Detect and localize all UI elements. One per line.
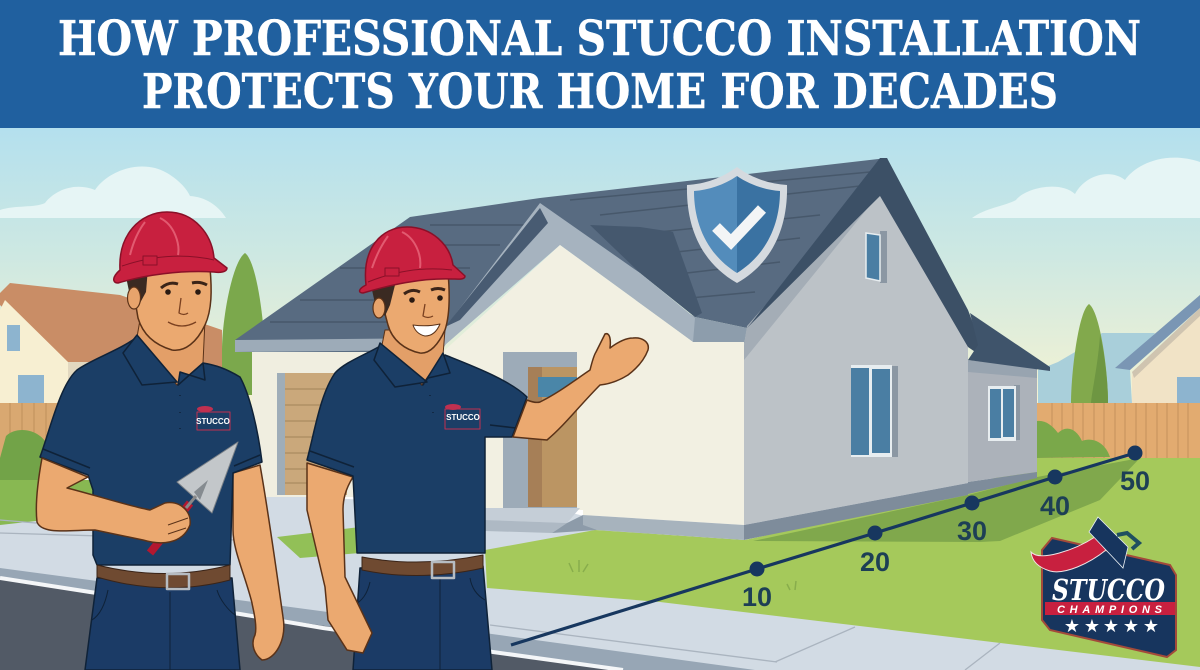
bush right xyxy=(1037,421,1110,458)
face xyxy=(379,272,449,353)
logo trowel xyxy=(1089,517,1139,568)
front wall base xyxy=(583,515,744,540)
grass patch xyxy=(277,527,360,558)
shirt logo xyxy=(445,404,480,429)
shield icon xyxy=(687,167,787,283)
collar xyxy=(374,343,450,387)
polo shirt xyxy=(40,337,262,565)
logo swoosh xyxy=(1031,537,1106,572)
cloud right xyxy=(972,158,1200,218)
timeline labels: 40 xyxy=(1040,491,1070,521)
timeline labels: 20 xyxy=(860,547,890,577)
grey side wall xyxy=(744,183,968,525)
cloud left xyxy=(0,167,226,218)
company logo xyxy=(1031,517,1176,657)
facial features xyxy=(161,282,207,326)
worker right xyxy=(307,227,648,670)
background hill right xyxy=(1038,333,1155,403)
neck xyxy=(137,320,205,385)
logo stars: ★ xyxy=(1123,616,1139,637)
bush left xyxy=(0,430,53,482)
worker left xyxy=(36,212,284,670)
logo stars: ★ xyxy=(1103,616,1119,637)
trowel xyxy=(177,442,238,513)
header banner xyxy=(0,0,1200,128)
timeline xyxy=(511,446,1150,645)
lawn shadow xyxy=(753,458,1140,542)
face xyxy=(132,268,211,350)
timeline labels xyxy=(742,466,1150,612)
timeline labels: 50 xyxy=(1120,466,1150,496)
shirt logo xyxy=(196,406,230,430)
timeline line xyxy=(511,453,1135,645)
title xyxy=(58,11,1141,120)
roof valley shadow xyxy=(590,225,702,317)
right arm xyxy=(233,465,284,660)
belt xyxy=(362,555,483,578)
logo wordmark: STUCCO xyxy=(1052,573,1165,607)
entry frame xyxy=(503,352,577,508)
tree right xyxy=(1071,304,1108,403)
upper roof xyxy=(235,158,968,352)
timeline nodes xyxy=(750,446,1142,576)
curb xyxy=(0,568,755,670)
lawn xyxy=(485,458,1200,667)
fence left xyxy=(0,403,60,458)
facial features xyxy=(404,288,445,336)
garage door xyxy=(277,373,347,495)
logo stars: ★ xyxy=(1143,616,1159,637)
shirt logo: STUCCO xyxy=(446,413,480,422)
grass tufts xyxy=(569,560,796,590)
tree left xyxy=(222,253,266,395)
logo stars: ★ xyxy=(1084,616,1100,637)
background house right xyxy=(1115,295,1200,403)
pants xyxy=(353,566,492,670)
polo shirt xyxy=(307,345,527,553)
logo stars xyxy=(1064,616,1159,637)
annex window xyxy=(988,385,1020,441)
sidewalk lines xyxy=(0,520,1000,670)
neck xyxy=(382,330,445,385)
front gable trim xyxy=(432,203,695,345)
roof shingles xyxy=(270,172,870,322)
logo red band xyxy=(1045,602,1175,615)
left arm and hand xyxy=(36,458,190,543)
entry steps xyxy=(485,508,597,533)
road xyxy=(0,578,623,670)
pavement xyxy=(0,495,1200,670)
logo badge xyxy=(1042,538,1176,657)
wall base xyxy=(744,483,968,540)
side gable trim xyxy=(744,180,880,360)
title: PROTECTS YOUR HOME FOR DECADES xyxy=(142,64,1058,120)
annex roof xyxy=(968,313,1050,371)
belt xyxy=(97,565,230,589)
shirt logo: STUCCO xyxy=(196,417,230,426)
trowel handle xyxy=(150,503,190,553)
garage wing wall xyxy=(252,350,460,497)
hair xyxy=(372,285,395,316)
fence right xyxy=(1037,403,1200,459)
pointing arm xyxy=(513,334,648,440)
roof eave left xyxy=(235,338,450,352)
timeline labels: 30 xyxy=(957,516,987,546)
hanging arm xyxy=(307,463,372,653)
hard hat xyxy=(114,212,227,283)
eave xyxy=(640,285,747,345)
hard hat xyxy=(360,227,465,293)
logo stars: ★ xyxy=(1064,616,1080,637)
pants xyxy=(85,578,240,670)
logo subtitle: CHAMPIONS xyxy=(1057,604,1163,616)
large window xyxy=(851,365,898,457)
timeline labels: 10 xyxy=(742,582,772,612)
house xyxy=(235,158,1050,540)
road line xyxy=(0,578,623,670)
cream front wall xyxy=(445,245,744,525)
hair xyxy=(125,268,148,303)
dark roof edge xyxy=(747,158,987,360)
background house left xyxy=(0,283,222,403)
ear xyxy=(128,287,140,309)
annex wall xyxy=(968,363,1037,482)
ear xyxy=(373,298,385,318)
grass left xyxy=(0,480,270,526)
collar xyxy=(123,335,205,385)
small window xyxy=(866,231,887,283)
